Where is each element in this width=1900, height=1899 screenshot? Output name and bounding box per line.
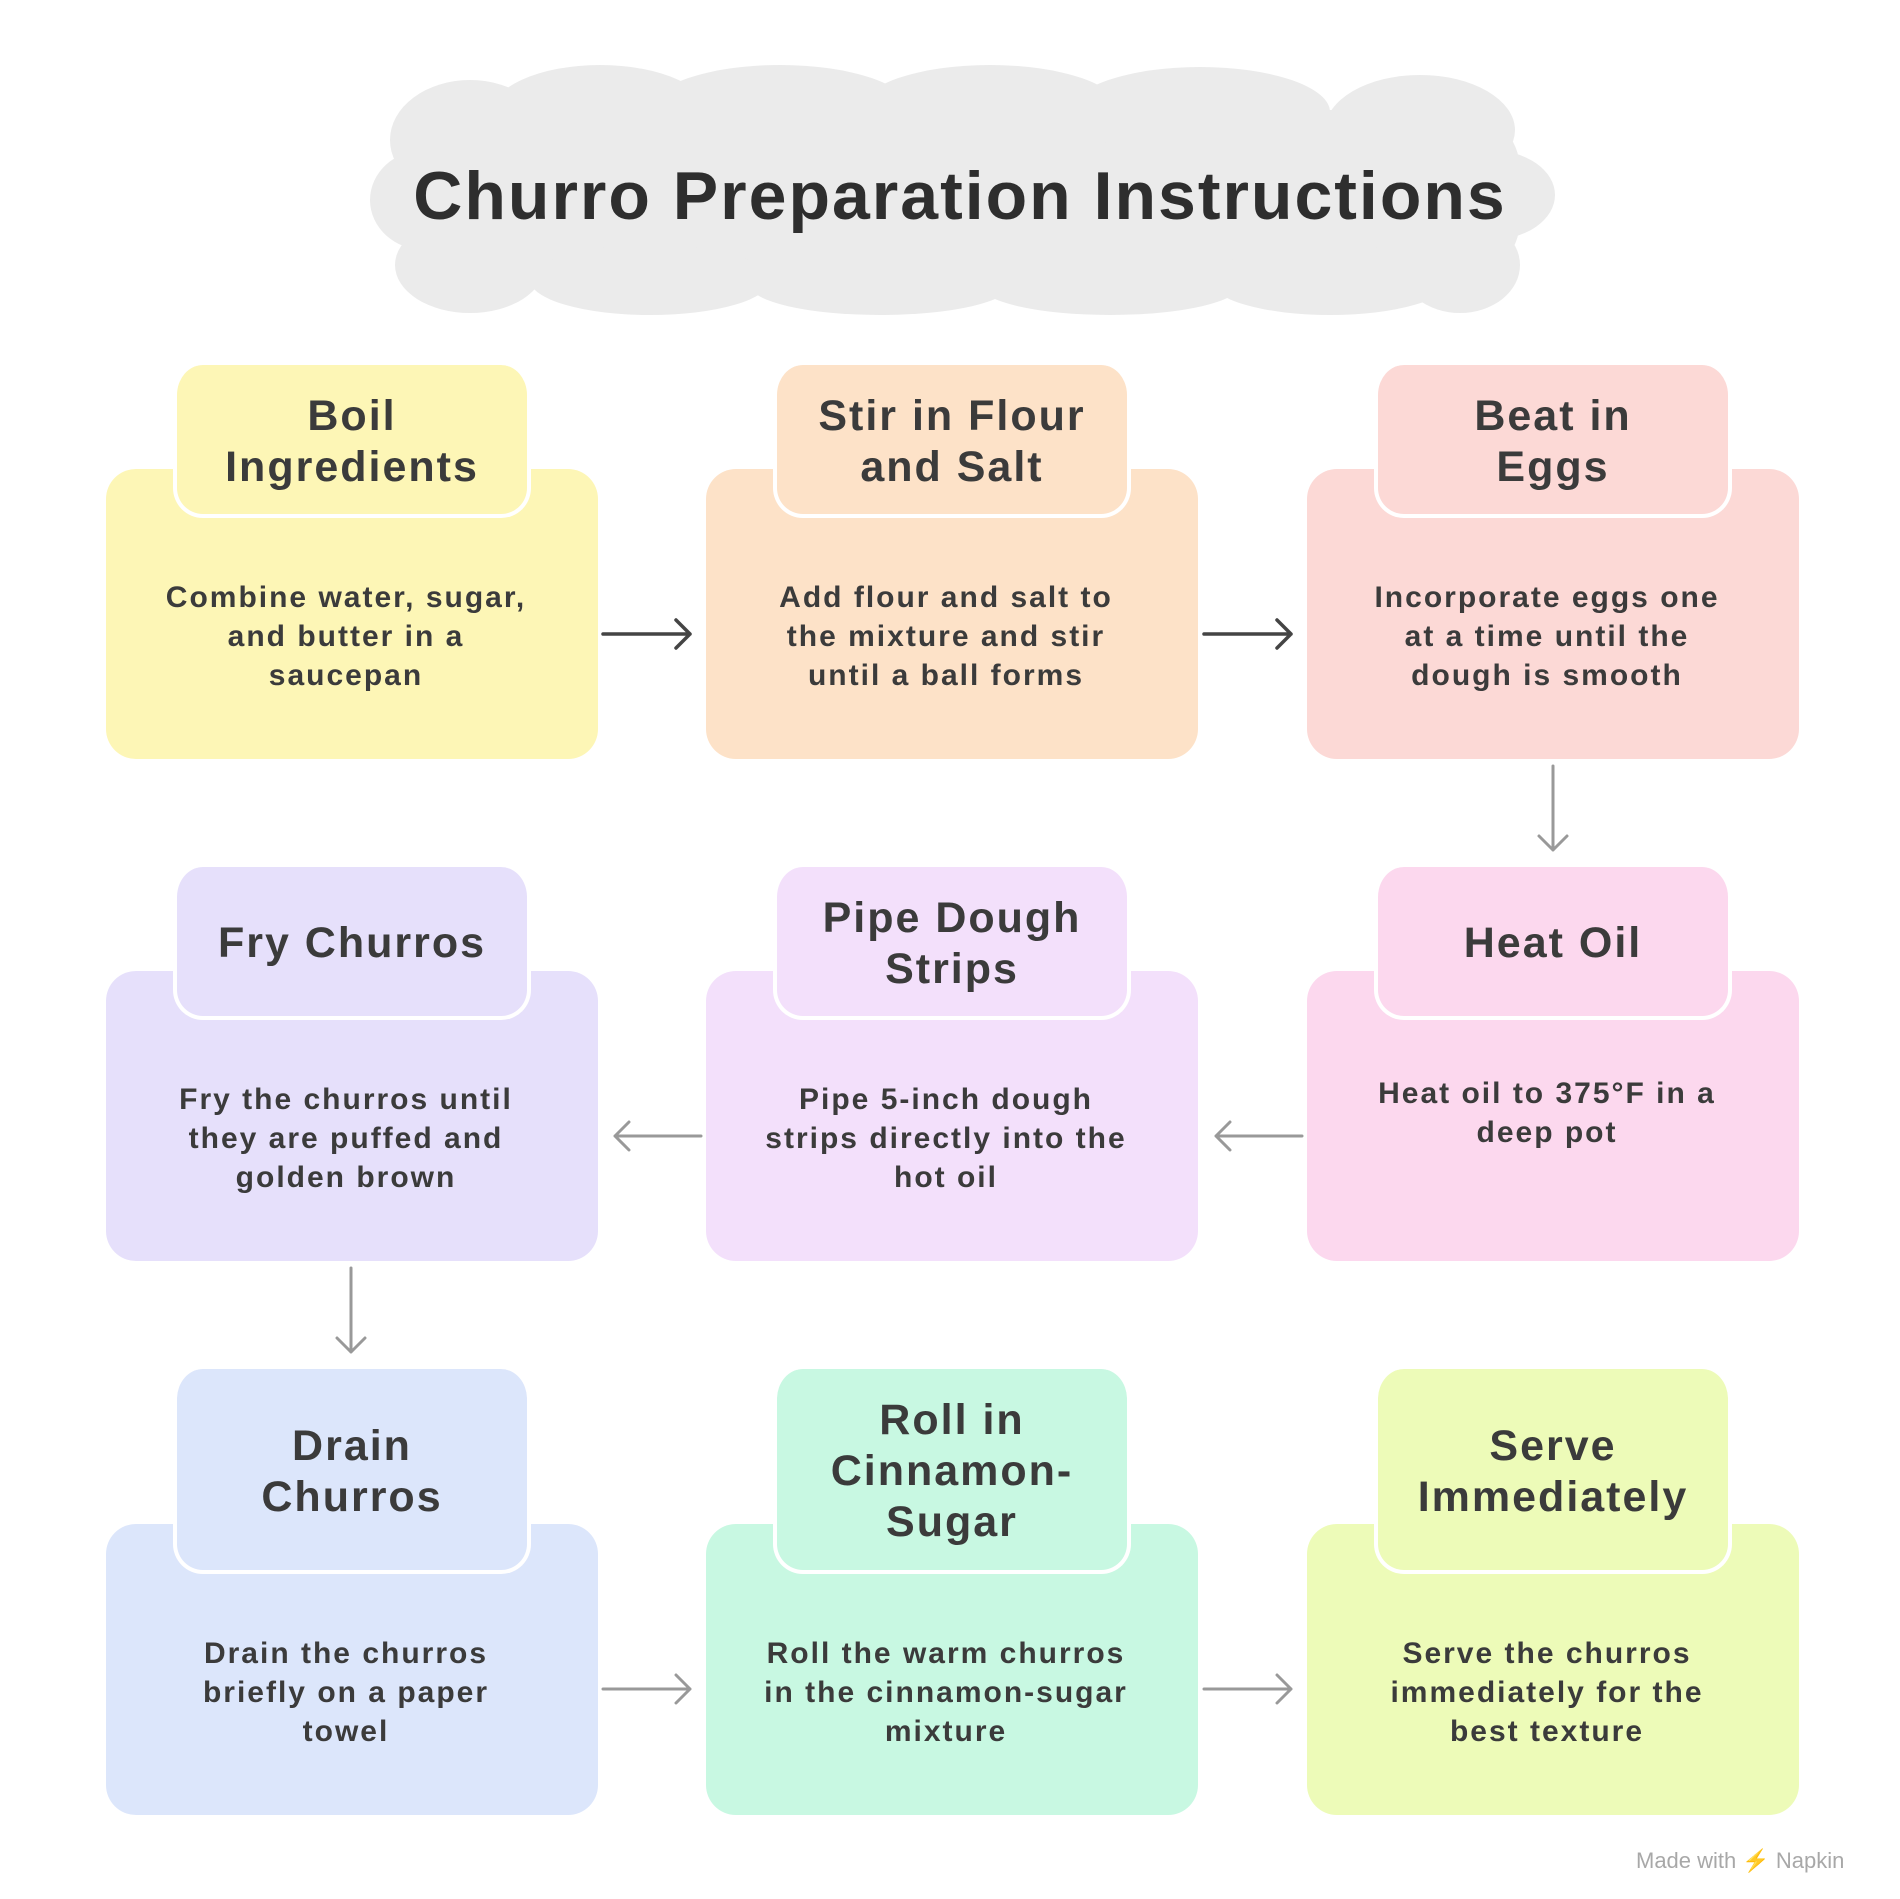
heading: Ingredients	[225, 442, 479, 490]
text: hot oil	[894, 1161, 998, 1194]
text	[179, 1083, 513, 1194]
text	[764, 1637, 1128, 1748]
heading: Beat in	[1474, 392, 1632, 440]
card: Beat in Eggs	[1307, 365, 1799, 759]
text: dough is smooth	[1411, 659, 1683, 692]
heading: Drain	[292, 1422, 412, 1470]
text: immediately for the	[1390, 1676, 1704, 1709]
text: and butter in a	[228, 620, 464, 653]
card: Heat Oil	[1307, 867, 1799, 1261]
card: Pipe Dough Strips	[706, 867, 1198, 1261]
text: Heat oil to 375°F in a	[1378, 1077, 1716, 1110]
heading: Stir in Flour	[818, 392, 1086, 440]
text: best texture	[1450, 1715, 1644, 1748]
text: in the cinnamon-sugar	[764, 1676, 1128, 1709]
text	[166, 581, 526, 692]
card: Drain Churros	[106, 1369, 598, 1815]
heading	[1474, 392, 1632, 490]
heading: Sugar	[886, 1498, 1018, 1546]
text: mixture	[885, 1715, 1007, 1748]
heading	[261, 1422, 443, 1520]
text: strips directly into the	[765, 1122, 1127, 1155]
text: Roll the warm churros	[767, 1637, 1125, 1670]
heading: Serve	[1489, 1422, 1617, 1470]
text	[1378, 1077, 1716, 1149]
text: until a ball forms	[808, 659, 1084, 692]
heading: Boil	[307, 392, 397, 440]
heading: Eggs	[1496, 442, 1610, 490]
heading: Roll in	[879, 1396, 1025, 1444]
heading: Strips	[885, 944, 1019, 992]
text: Fry the churros until	[179, 1083, 513, 1116]
text: Add flour and salt to	[779, 581, 1113, 614]
text: towel	[303, 1715, 389, 1748]
heading	[818, 392, 1086, 490]
text: the mixture and stir	[787, 620, 1105, 653]
title cloud	[370, 65, 1555, 315]
heading	[1418, 1422, 1688, 1520]
text: they are puffed and	[189, 1122, 503, 1155]
heading: Immediately	[1418, 1472, 1688, 1520]
heading: Heat Oil	[1464, 919, 1642, 967]
text	[1390, 1637, 1704, 1748]
text	[779, 581, 1113, 692]
text: at a time until the	[1405, 620, 1689, 653]
heading	[225, 392, 479, 490]
text: Incorporate eggs one	[1374, 581, 1720, 614]
heading	[823, 894, 1081, 992]
text: briefly on a paper	[203, 1676, 489, 1709]
text: golden brown	[236, 1161, 456, 1194]
heading	[831, 1396, 1073, 1546]
heading: Fry Churros	[218, 919, 486, 967]
text	[203, 1637, 489, 1748]
heading: Pipe Dough	[823, 894, 1081, 942]
text: saucepan	[269, 659, 423, 692]
title: Churro Preparation Instructions	[413, 158, 1507, 234]
text: Drain the churros	[204, 1637, 488, 1670]
heading: Churros	[261, 1472, 443, 1520]
card: Serve Immediately	[1307, 1369, 1799, 1815]
card: Roll in Cinnamon-Sugar	[706, 1369, 1198, 1815]
text	[765, 1083, 1127, 1194]
text: deep pot	[1476, 1116, 1618, 1149]
card: Fry Churros	[106, 867, 598, 1261]
text	[1374, 581, 1720, 692]
heading: Cinnamon-	[831, 1447, 1073, 1495]
text: Serve the churros	[1402, 1637, 1692, 1670]
card: Stir in Flour	[706, 365, 1198, 759]
text: Pipe 5-inch dough	[799, 1083, 1093, 1116]
watermark: Made with ⚡ Napkin	[1636, 1848, 1844, 1873]
heading: and Salt	[860, 442, 1044, 490]
card: Boil Ingredients	[106, 365, 598, 759]
text: Combine water, sugar,	[166, 581, 526, 614]
